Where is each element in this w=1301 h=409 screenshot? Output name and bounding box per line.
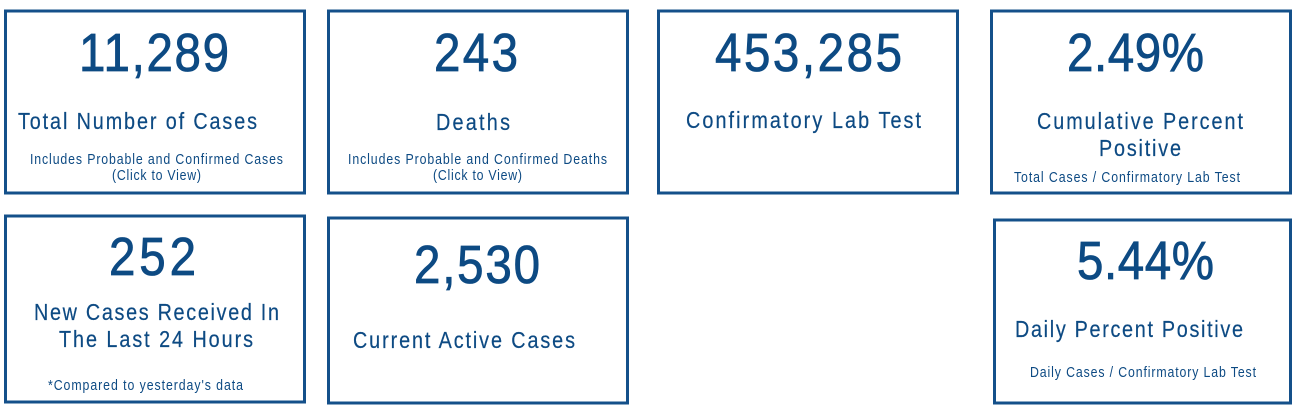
panel: confirmatory lab test — [658, 11, 958, 193]
label: cumulative percent positive: Positive — [1099, 136, 1181, 161]
label: deaths: Deaths — [436, 110, 510, 135]
panel: cumulative percent positive — [992, 11, 1290, 193]
value: new cases: 252 — [109, 226, 196, 287]
note: daily cases over lab tests: Daily Cases / Confirmatory Lab Test — [1030, 364, 1256, 380]
label: cumulative percent positive: Cumulative Percent — [1037, 109, 1243, 134]
note: includes probable and confirmed deaths: (Click to View) — [433, 167, 522, 183]
note: compared to yesterday: *Compared to yesterday's data — [48, 377, 243, 393]
panel: total number of cases — [6, 11, 304, 193]
label: total number of cases: Total Number of Cases — [18, 109, 257, 134]
label: new cases received: New Cases Received In — [34, 300, 279, 325]
value: cumulative percent: 2.49% — [1067, 22, 1204, 83]
panel: deaths — [328, 11, 628, 193]
panel: daily percent positive — [994, 220, 1290, 403]
value: total cases: 11,289 — [79, 22, 229, 83]
label: new cases received — [34, 300, 279, 352]
panel: current active cases — [328, 218, 628, 403]
note: includes probable and confirmed deaths — [348, 151, 607, 183]
value: daily percent: 5.44% — [1077, 230, 1214, 291]
panel: new cases in last 24 hours — [6, 216, 304, 402]
label: new cases received: The Last 24 Hours — [59, 327, 253, 352]
value: deaths: 243 — [434, 22, 518, 83]
label: current active cases: Current Active Cases — [353, 328, 575, 353]
label: cumulative percent positive — [1037, 109, 1243, 161]
note: includes probable and confirmed deaths: Includes Probable and Confirmed Deaths — [348, 151, 607, 167]
note: includes probable and confirmed cases: Includes Probable and Confirmed Cases — [30, 151, 283, 167]
value: active cases: 2,530 — [414, 234, 540, 295]
note: includes probable and confirmed cases — [30, 151, 283, 183]
note: includes probable and confirmed cases: (Click to View) — [112, 167, 201, 183]
label: confirmatory lab test: Confirmatory Lab Test — [686, 108, 921, 133]
label: daily percent positive: Daily Percent Positive — [1015, 317, 1243, 342]
value: lab tests: 453,285 — [715, 22, 902, 83]
note: total cases over lab tests: Total Cases / Confirmatory Lab Test — [1014, 169, 1240, 185]
